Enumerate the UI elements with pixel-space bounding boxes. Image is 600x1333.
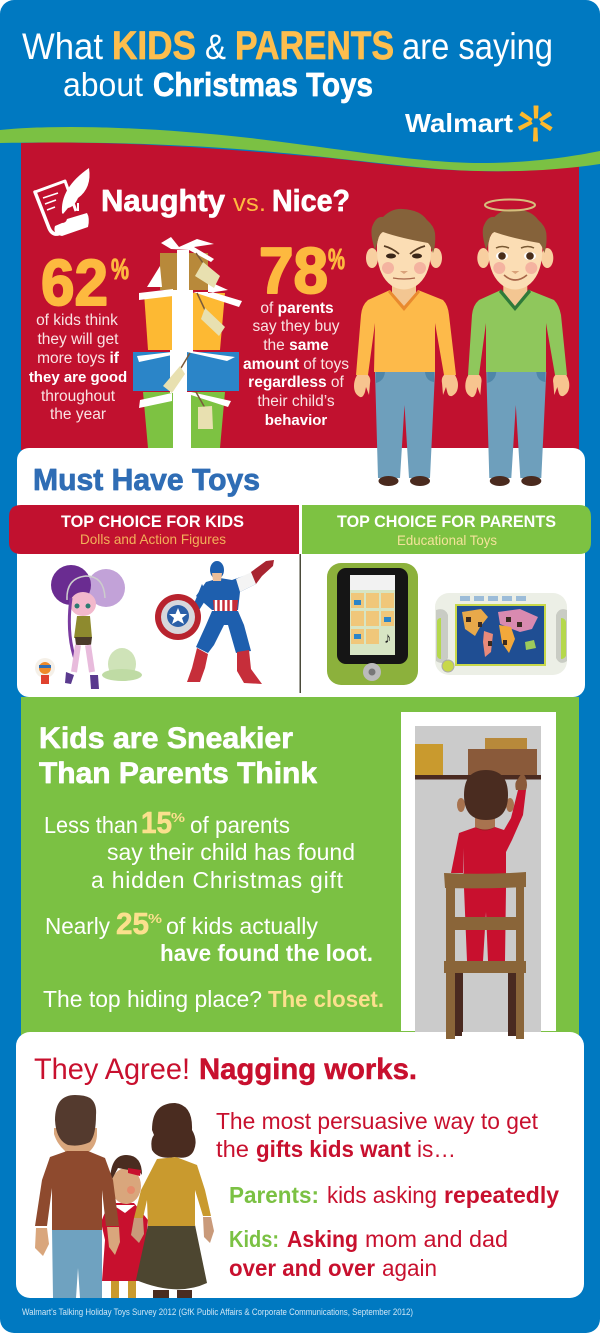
illustration: nice boy with halo <box>465 200 569 486</box>
text: most persuasive way: the <box>216 1136 249 1162</box>
icon: halo <box>485 200 535 210</box>
label: top choice for parents: Educational Toys <box>397 532 497 548</box>
stat: 62 percent of kids: they will get <box>38 331 119 348</box>
figure: mother <box>131 1103 214 1298</box>
text: most persuasive way: The most persuasive way to get <box>216 1108 539 1134</box>
text: kids answer: over and over <box>229 1255 375 1281</box>
heading: naughty vs nice: Naughty <box>101 183 226 218</box>
heading: they agree nagging works: They Agree! <box>34 1053 190 1086</box>
text: nearly 25 percent of kids: of kids actually <box>166 913 318 939</box>
title: about <box>63 66 143 103</box>
illustration: child searching the closet <box>401 712 556 1039</box>
text: parents answer: repeatedly <box>444 1182 559 1208</box>
illustration: chair front legs <box>446 1030 524 1039</box>
text: most persuasive way: gifts kids want <box>256 1136 411 1162</box>
icon: quill and scroll <box>35 168 90 236</box>
text: less than 15 percent of parents: Less than <box>44 812 138 838</box>
stat: 78 percent of parents: 78 <box>259 234 328 307</box>
text: nearly 25 percent of kids: % <box>148 911 163 926</box>
text: top hiding place: The top hiding place? <box>43 986 262 1012</box>
text: kids answer: mom and dad <box>365 1226 508 1252</box>
text: parents answer: kids asking <box>327 1182 437 1208</box>
label: top choice for parents: TOP CHOICE FOR PARENTS <box>337 512 556 531</box>
heading: naughty vs nice: vs. <box>233 190 266 217</box>
toy: superhero action figure <box>155 560 274 684</box>
stat: 78 percent of parents: amount of toys <box>243 356 349 373</box>
stat: 78 percent of parents: regardless of <box>248 374 345 391</box>
header swoosh <box>0 127 600 171</box>
stat: 62 percent of kids: they are good <box>29 369 127 386</box>
title: What <box>22 26 104 67</box>
figure: father <box>35 1095 120 1298</box>
text: nearly 25 percent of kids: 25 <box>116 906 149 941</box>
heading: they agree nagging works: Nagging works. <box>199 1053 417 1086</box>
text: nearly 25 percent of kids <box>45 906 373 966</box>
text: less than 15 percent of parents: say their child has found <box>107 839 355 865</box>
title: KIDS <box>112 24 196 68</box>
toy: green learning tablet: ♪ <box>384 630 392 647</box>
heading: kids are sneakier than parents think: Kids are Sneakier <box>39 722 293 755</box>
label: top choice for kids: TOP CHOICE FOR KIDS <box>61 512 244 531</box>
text: top hiding place <box>43 986 384 1012</box>
text: kids answer: Kids: <box>229 1226 279 1252</box>
text: kids answer: Asking <box>287 1226 358 1252</box>
heading: they agree nagging works <box>34 1053 417 1086</box>
text: less than 15 percent of parents <box>44 805 355 893</box>
figure: girl <box>101 1155 148 1298</box>
stat: 62 percent of kids: of kids think <box>36 312 118 329</box>
heading: kids are sneakier than parents think: Than Parents Think <box>39 757 317 790</box>
stat: 78 percent of parents: say they buy <box>252 318 340 335</box>
stat: 62 percent of kids: % <box>111 254 129 286</box>
text: less than 15 percent of parents: 15 <box>141 805 172 840</box>
panel: must have toys <box>9 448 591 697</box>
text: less than 15 percent of parents: of parents <box>190 812 290 838</box>
label: top choice for parents <box>302 505 591 554</box>
text: less than 15 percent of parents: % <box>171 810 186 825</box>
text: most persuasive way: is… <box>417 1136 456 1162</box>
illustration: stack of gifts <box>133 237 242 448</box>
text: parents answer: Parents: <box>229 1182 319 1208</box>
title <box>22 24 553 103</box>
text: kids answer: again <box>382 1255 437 1281</box>
title: PARENTS <box>235 24 394 68</box>
text: nearly 25 percent of kids: have found the loot. <box>160 940 373 966</box>
illustration: naughty boy <box>354 209 458 486</box>
stat: 62 percent of kids: 62 <box>41 246 108 319</box>
text: less than 15 percent of parents: a hidden Christmas gift <box>91 867 344 893</box>
panel: kids are sneakier <box>21 697 579 1039</box>
stat: 62 percent of kids <box>29 246 129 423</box>
stat: 78 percent of parents <box>243 234 349 429</box>
toy: doll with alien friends <box>35 565 142 689</box>
panel: nagging works <box>16 1030 584 1298</box>
heading: naughty vs nice <box>101 183 350 218</box>
icon: walmart spark <box>518 106 552 141</box>
title: are saying <box>402 26 553 67</box>
toy: world map tablet <box>435 593 567 675</box>
toy: green learning tablet <box>327 563 418 685</box>
text: parents answer <box>229 1182 559 1208</box>
stat: 62 percent of kids: more toys if <box>37 350 120 367</box>
logo: walmart: Walmart <box>405 108 513 138</box>
illustration: family from behind <box>35 1095 214 1298</box>
logo: walmart <box>405 106 552 141</box>
text: kids answer <box>229 1226 508 1281</box>
label: top choice for kids <box>9 505 299 554</box>
stat: 78 percent of parents: % <box>328 244 345 276</box>
panel: naughty vs nice <box>21 142 579 450</box>
stat: 78 percent of parents: the same <box>263 337 329 354</box>
heading: kids are sneakier than parents think <box>39 722 317 790</box>
stat: 62 percent of kids: throughout <box>41 388 116 405</box>
title: & <box>205 28 226 67</box>
title: Christmas Toys <box>153 66 373 103</box>
text: top hiding place: The closet. <box>268 986 384 1012</box>
stat: 78 percent of parents: of parents <box>260 300 334 317</box>
illustration: chair legs overlapping panel edge <box>455 1030 516 1036</box>
text: nearly 25 percent of kids: Nearly <box>45 913 110 939</box>
stat: 62 percent of kids: the year <box>50 406 106 423</box>
heading: must have toys: Must Have Toys <box>33 462 260 497</box>
heading: naughty vs nice: Nice? <box>272 183 350 218</box>
stat: 78 percent of parents: behavior <box>265 412 327 429</box>
stat: 78 percent of parents: their child’s <box>257 393 335 410</box>
footer: source note: Walmart’s Talking Holiday Toys Survey 2012 (GfK Public Affairs & Corporate Communications, September 2012) <box>22 1307 413 1317</box>
label: top choice for kids: Dolls and Action Figures <box>80 531 226 547</box>
text: most persuasive way <box>216 1108 539 1162</box>
